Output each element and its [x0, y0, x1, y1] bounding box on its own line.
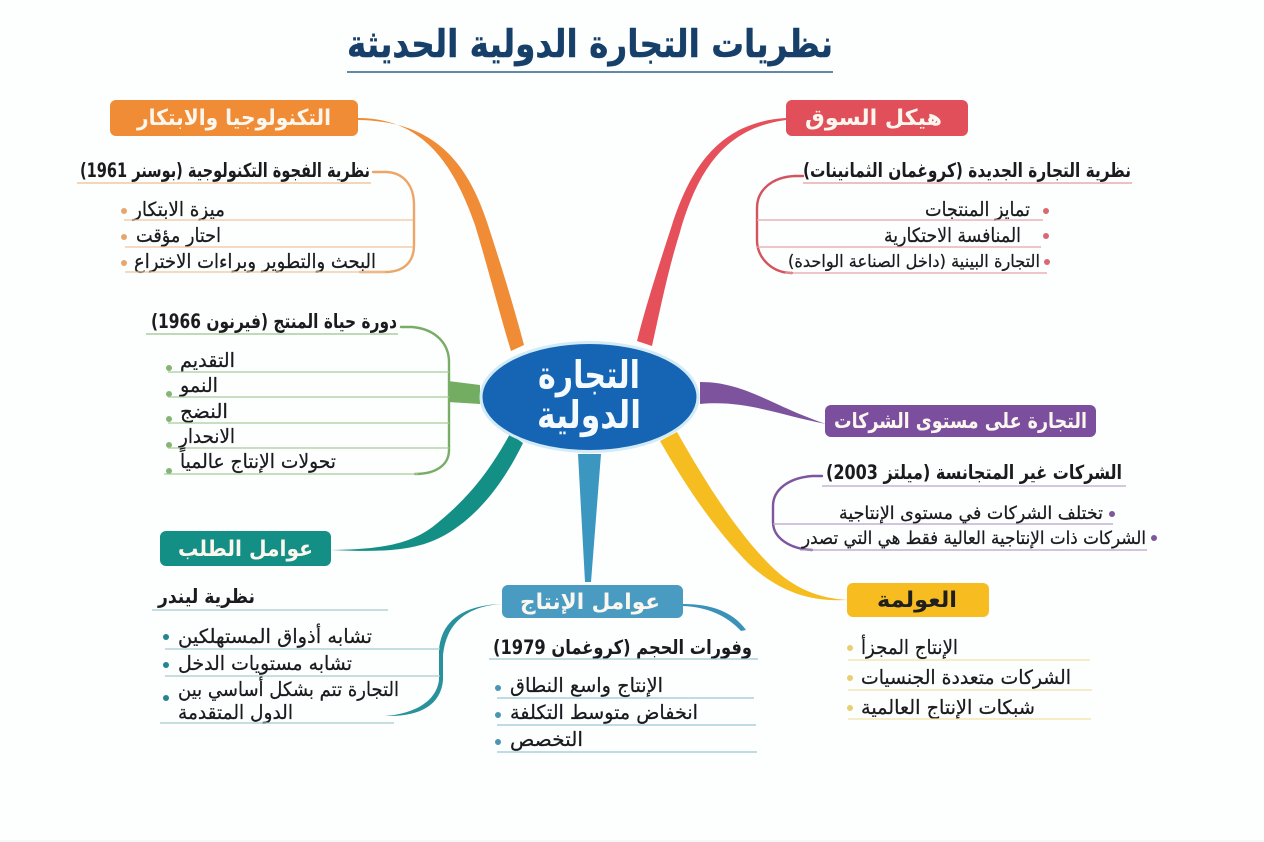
list: globalization items: شبكات الإنتاج العالمية	[861, 696, 1035, 719]
pill: demand factors: عوامل الطلب	[178, 537, 313, 562]
pill: production factors	[502, 585, 683, 618]
list: life cycle stages: النمو	[179, 374, 218, 397]
heading: new trade theory: نظرية التجارة الجديدة (كروغمان الثمانينات)	[803, 159, 1131, 182]
branch: production factors	[578, 454, 601, 582]
branch: market structure	[637, 118, 786, 346]
branch: technology	[358, 118, 524, 351]
pill: production factors: عوامل الإنتاج	[520, 590, 660, 615]
list: production items	[495, 674, 757, 752]
list: demand items	[160, 624, 440, 724]
list: globalization items: الشركات متعددة الجنسيات	[861, 666, 1071, 689]
central node: الدولية	[537, 393, 641, 438]
list: market structure items	[757, 198, 1050, 273]
panel: technology and innovation	[77, 100, 414, 273]
list: firm items	[773, 503, 1157, 550]
list: production items: انخفاض متوسط التكلفة	[510, 701, 698, 724]
heading: technology gap: نظرية الفجوة التكنولوجية (بوسنر 1961)	[80, 159, 370, 182]
pill: globalization: العولمة	[877, 588, 957, 613]
list: life cycle stages: النضج	[180, 400, 228, 423]
list: market structure items: التجارة البينية (داخل الصناعة الواحدة)	[788, 252, 1040, 272]
list: production items: التخصص	[510, 728, 583, 751]
list: life cycle stages: تحولات الإنتاج عالمياً	[180, 447, 336, 473]
pill: market structure	[786, 100, 968, 136]
list: technology items: احتار مؤقت	[136, 224, 221, 247]
branch: globalization	[660, 432, 847, 600]
heading: economies of scale: وفورات الحجم (كروغمان 1979)	[493, 636, 752, 659]
heading: heterogeneous firms: الشركات غير المتجانسة (ميلتز 2003)	[826, 461, 1122, 484]
panel: firm level trade	[773, 405, 1157, 550]
connector: production right curve	[683, 604, 746, 631]
panel: globalization	[847, 583, 1092, 719]
panel: market structure	[757, 100, 1132, 273]
panel: product life cycle	[146, 310, 449, 474]
list: life cycle stages	[164, 349, 449, 474]
branch: firm level	[700, 382, 826, 424]
list: demand items: الدول المتقدمة	[178, 701, 293, 724]
list: market structure items: المنافسة الاحتكارية	[884, 224, 1021, 247]
branch: demand factors	[331, 434, 523, 551]
panel: production factors	[489, 585, 758, 752]
pill: firm level	[825, 405, 1096, 437]
title: نظريات التجارة الدولية الحديثة	[347, 22, 833, 67]
list: technology items: ميزة الابتكار	[132, 198, 225, 221]
list: life cycle stages: الانحدار	[178, 425, 235, 448]
list: firm items: الشركات ذات الإنتاجية العالية فقط هي التي تصدر	[801, 528, 1146, 549]
pill: market structure: هيكل السوق	[805, 106, 942, 131]
pill: globalization	[847, 583, 989, 617]
pill: demand factors	[160, 531, 331, 566]
pill: technology	[110, 100, 358, 136]
central node	[481, 342, 698, 452]
list: firm items: تختلف الشركات في مستوى الإنتاجية	[839, 503, 1103, 524]
list: demand items: تشابه أذواق المستهلكين	[178, 624, 372, 648]
list: life cycle stages: التقديم	[180, 349, 235, 372]
list: production items: الإنتاج واسع النطاق	[510, 674, 663, 697]
heading: product life cycle: دورة حياة المنتج (فيرنون 1966)	[151, 310, 397, 333]
branch: product life cycle connector	[448, 381, 480, 404]
list: technology items: البحث والتطوير وبراءات الاختراع	[134, 250, 376, 273]
list: demand items: التجارة تتم بشكل أساسي بين	[178, 677, 399, 701]
heading: Linder theory: نظرية ليندر	[157, 585, 255, 608]
list: globalization items: الإنتاج المجزأ	[861, 635, 958, 659]
list: market structure items: تمايز المنتجات	[925, 198, 1030, 221]
pill: firm level: التجارة على مستوى الشركات	[834, 409, 1087, 433]
list: demand items: تشابه مستويات الدخل	[178, 652, 352, 675]
connector: demand bracket	[385, 604, 502, 716]
list: globalization items	[847, 635, 1092, 719]
central node: التجارة	[538, 353, 640, 397]
pill: technology: التكنولوجيا والابتكار	[136, 106, 331, 131]
list: technology items	[121, 198, 413, 273]
panel: demand factors	[152, 531, 502, 724]
